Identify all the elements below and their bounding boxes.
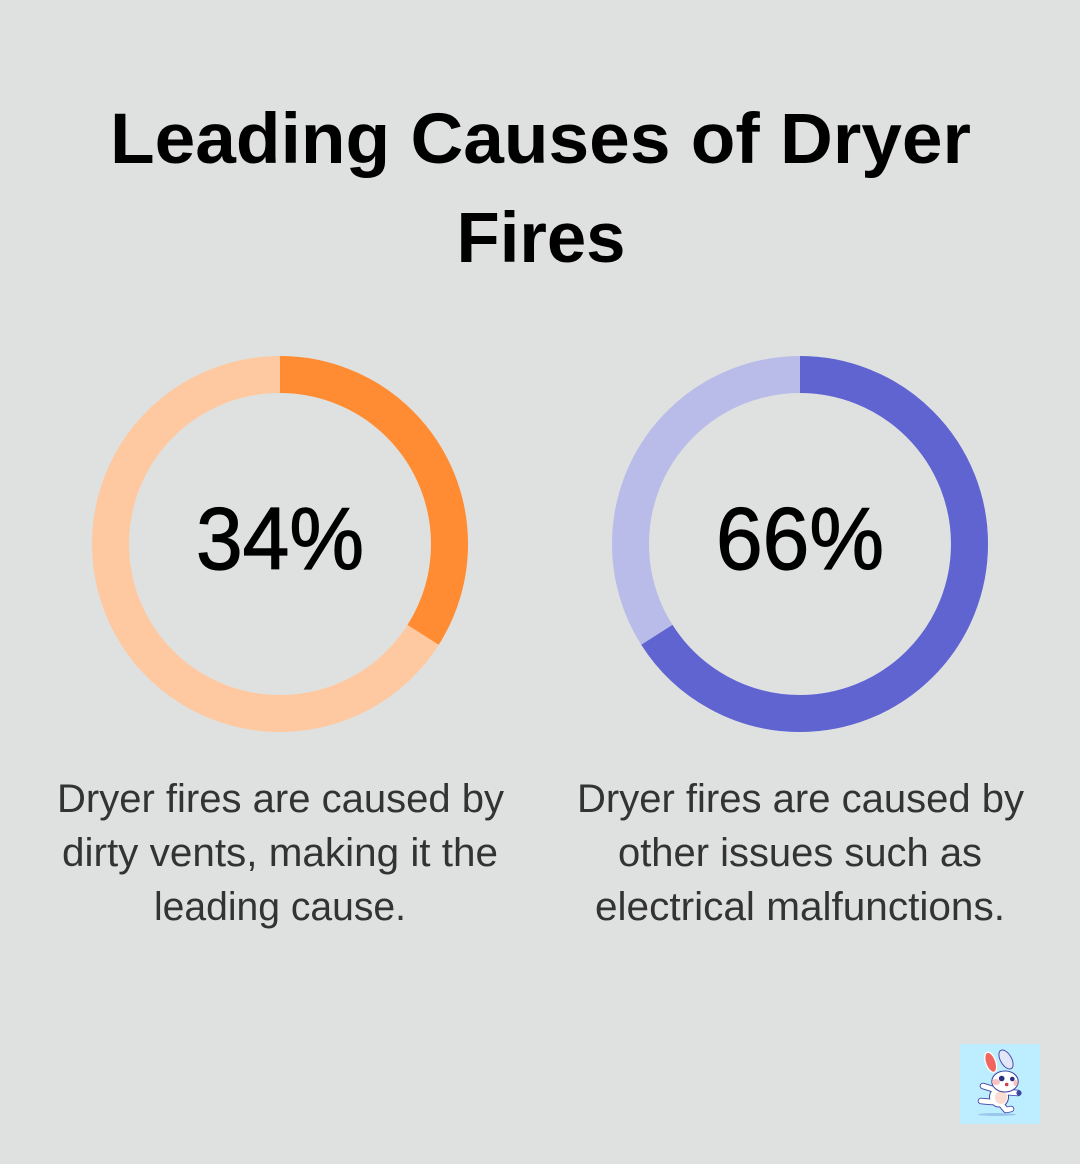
panel: other issues statistic (577, 374, 1024, 929)
donut chart: 66% (630, 374, 970, 714)
title (110, 100, 971, 278)
description: other issues: Dryer fires are caused by (577, 777, 1024, 821)
description: dirty vents (57, 777, 504, 929)
icon: running rabbit logo (960, 1044, 1040, 1124)
title: Leading Causes of Dryer (110, 100, 971, 179)
panel: dirty vents statistic (57, 374, 504, 929)
description: dirty vents: leading cause. (154, 885, 406, 929)
value: 34%: 34% (196, 489, 364, 588)
description: dirty vents: Dryer fires are caused by (57, 777, 504, 821)
donut chart: 34% (110, 374, 450, 714)
description: other issues (577, 777, 1024, 929)
description: other issues: electrical malfunctions. (595, 885, 1005, 929)
title: Fires (456, 199, 626, 278)
description: other issues: other issues such as (618, 831, 982, 875)
description: dirty vents: dirty vents, making it the (62, 831, 498, 875)
value: 66%: 66% (716, 489, 884, 588)
